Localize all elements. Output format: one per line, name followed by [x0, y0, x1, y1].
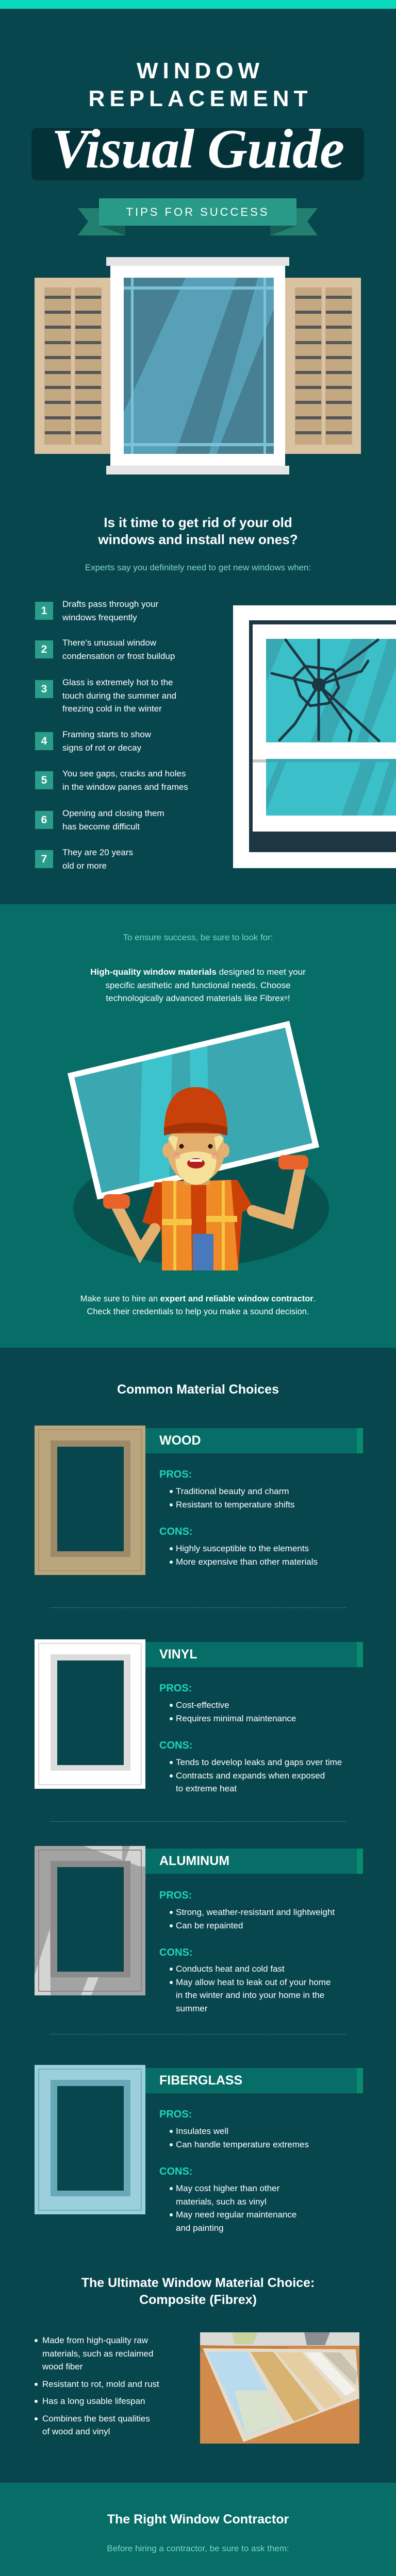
item 5: in the window panes and frames	[62, 782, 188, 791]
item 3	[35, 677, 176, 714]
illustration: broken window	[233, 605, 396, 868]
pros list: Resistant to temperature shifts	[176, 1499, 295, 1510]
subheading: experts say: Experts say you definitely need to get new windows when:	[85, 563, 311, 572]
list: fibrex benefits: of wood and vinyl	[42, 2427, 110, 2436]
pros list: Traditional beauty and charm	[176, 1486, 289, 1496]
item 7: old or more	[62, 860, 107, 871]
top accent bar	[0, 0, 396, 9]
header: wood: WOOD	[159, 1433, 201, 1448]
list: fibrex benefits: Has a long usable lifespan	[42, 2396, 145, 2406]
item 3: Glass is extremely hot to the	[62, 677, 173, 687]
pros label: PROS:	[159, 2109, 192, 2120]
pros list: Strong, weather-resistant and lightweight	[176, 1907, 335, 1917]
list: fibrex benefits: Made from high-quality raw	[42, 2335, 148, 2345]
heading: ultimate material choice	[81, 2276, 315, 2307]
cons list	[170, 1544, 318, 1566]
item 4	[35, 730, 151, 752]
section: hero	[0, 9, 396, 904]
list: fibrex benefits	[35, 2335, 159, 2436]
item 2: There’s unusual window	[62, 638, 156, 648]
text: hire an expert contractor: Make sure to hire an expert and reliable window contractor.	[80, 1294, 316, 1303]
pros list: Requires minimal maintenance	[176, 1714, 296, 1723]
pros list	[170, 1907, 335, 1930]
item 4: Framing starts to show	[62, 730, 151, 739]
header: aluminum	[145, 1849, 363, 1874]
card: wood	[35, 1426, 363, 1575]
heading: is it time: Is it time to get rid of your old	[104, 515, 292, 530]
item 2: 2	[41, 643, 47, 655]
cons list: in the winter and into your home in the	[176, 1990, 324, 2000]
list: fibrex benefits: materials, such as reclaimed	[42, 2348, 153, 2359]
cons label: CONS:	[159, 1740, 192, 1751]
subheading: before hiring: Before hiring a contractor, be sure to ask them:	[107, 2544, 289, 2553]
cons label: CONS:	[159, 1947, 192, 1958]
ribbon text: TIPS FOR SUCCESS	[126, 206, 269, 218]
heading: is it time	[98, 515, 298, 547]
item 5: 5	[41, 774, 47, 786]
cons list: May cost higher than other	[176, 2183, 279, 2193]
list: fibrex benefits: wood fiber	[42, 2362, 82, 2371]
photo: fibrex material display	[200, 2332, 359, 2444]
item 3: touch during the summer and	[62, 690, 176, 701]
heading: ultimate material choice: The Ultimate Window Material Choice:	[81, 2276, 315, 2290]
text: high-quality materials: High-quality window materials designed to meet your	[90, 967, 306, 977]
pros list	[170, 1486, 295, 1510]
cons list: Tends to develop leaks and gaps over time	[176, 1757, 342, 1767]
pros list: Insulates well	[176, 2126, 228, 2136]
card: aluminum	[35, 1846, 363, 2013]
item 5: You see gaps, cracks and holes	[62, 769, 186, 778]
list: fibrex benefits: Combines the best qualities	[42, 2413, 150, 2424]
title: window replacement	[89, 58, 312, 111]
item 6: 6	[41, 814, 47, 826]
pros list: Can be repainted	[176, 1921, 243, 1930]
list: fibrex benefits: Resistant to rot, mold and rust	[42, 2379, 159, 2388]
header: wood	[145, 1428, 363, 1453]
title: window replacement: WINDOW	[137, 58, 264, 83]
cons list: and painting	[176, 2223, 224, 2233]
item 7	[35, 848, 133, 871]
pros list	[170, 1700, 296, 1723]
cons list	[170, 1757, 342, 1793]
pros list: Cost-effective	[176, 1700, 229, 1710]
item 7: 7	[41, 853, 47, 865]
heading: is it time: windows and install new ones?	[98, 532, 298, 547]
item 7: They are 20 years	[62, 848, 133, 857]
header: aluminum: ALUMINUM	[159, 1854, 229, 1868]
item 5	[35, 769, 188, 791]
item 2: condensation or frost buildup	[62, 651, 175, 660]
title box: visual guide	[31, 128, 364, 180]
icon: wood frame	[35, 1426, 145, 1575]
item 1: windows frequently	[62, 612, 137, 622]
cons label: CONS:	[159, 1526, 192, 1537]
item 3: freezing cold in the winter	[62, 704, 162, 714]
illustration: window with shutters	[35, 257, 361, 474]
icon: vinyl frame	[35, 1639, 145, 1789]
heading: common material choices: Common Material Choices	[117, 1382, 279, 1397]
pros list	[170, 2126, 309, 2149]
subheading: ensure success: To ensure success, be sure to look for:	[123, 933, 273, 942]
cons label: CONS:	[159, 2166, 192, 2177]
cons list: More expensive than other materials	[176, 1557, 318, 1566]
header: fiberglass: FIBERGLASS	[159, 2073, 242, 2088]
item 2	[35, 638, 175, 660]
cons list: Contracts and expands when exposed	[176, 1770, 325, 1781]
header: vinyl	[145, 1642, 363, 1667]
section: ensure success	[0, 904, 396, 1348]
cons list	[170, 2183, 296, 2233]
cons list: Conducts heat and cold fast	[176, 1964, 285, 1974]
script title text: Visual Guide	[52, 118, 344, 180]
heading: ultimate material choice: Composite (Fibrex)	[139, 2293, 257, 2307]
item 4: signs of rot or decay	[62, 743, 141, 752]
title: window replacement: REPLACEMENT	[89, 86, 312, 111]
text: hire an expert contractor: Check their credentials to help you make a sound decision.	[87, 1307, 309, 1316]
cons list: May need regular maintenance	[176, 2210, 296, 2219]
icon: aluminum frame	[35, 1846, 145, 1995]
section: right contractor	[0, 2483, 396, 2576]
cons list: materials, such as vinyl	[176, 2197, 267, 2206]
text: high-quality materials	[90, 967, 306, 1003]
item 1: Drafts pass through your	[62, 599, 158, 609]
cons list: summer	[176, 2003, 207, 2013]
pros label: PROS:	[159, 1890, 192, 1901]
text: high-quality materials: technologically advanced materials like Fibrex®!	[106, 993, 290, 1003]
item 3: 3	[41, 683, 47, 695]
cons list: Highly susceptible to the elements	[176, 1544, 309, 1553]
illustration: worker holding window	[68, 1021, 329, 1270]
item 6: Opening and closing them	[62, 808, 164, 818]
cons list: May allow heat to leak out of your home	[176, 1977, 331, 1987]
cons list: to extreme heat	[176, 1784, 237, 1793]
pros label: PROS:	[159, 1683, 192, 1694]
heading: right window contractor: The Right Window Contractor	[107, 2512, 289, 2527]
item 6	[35, 808, 164, 832]
pros list: Can handle temperature extremes	[176, 2139, 309, 2149]
section: common material choices	[0, 1348, 396, 2483]
item 1	[35, 599, 158, 622]
item 6: has become difficult	[62, 821, 140, 832]
header: vinyl: VINYL	[159, 1647, 197, 1662]
header: fiberglass	[145, 2068, 363, 2093]
pros label: PROS:	[159, 1469, 192, 1480]
text: hire an expert contractor	[80, 1294, 316, 1316]
text: high-quality materials: specific aesthetic and functional needs. Choose	[105, 980, 291, 990]
cons list	[170, 1964, 331, 2013]
icon: fiberglass frame	[35, 2065, 145, 2214]
item 4: 4	[41, 735, 47, 747]
item 1: 1	[41, 605, 47, 617]
ribbon: tips for success	[78, 198, 318, 235]
card: vinyl	[35, 1639, 363, 1793]
card: fiberglass	[35, 2065, 363, 2233]
